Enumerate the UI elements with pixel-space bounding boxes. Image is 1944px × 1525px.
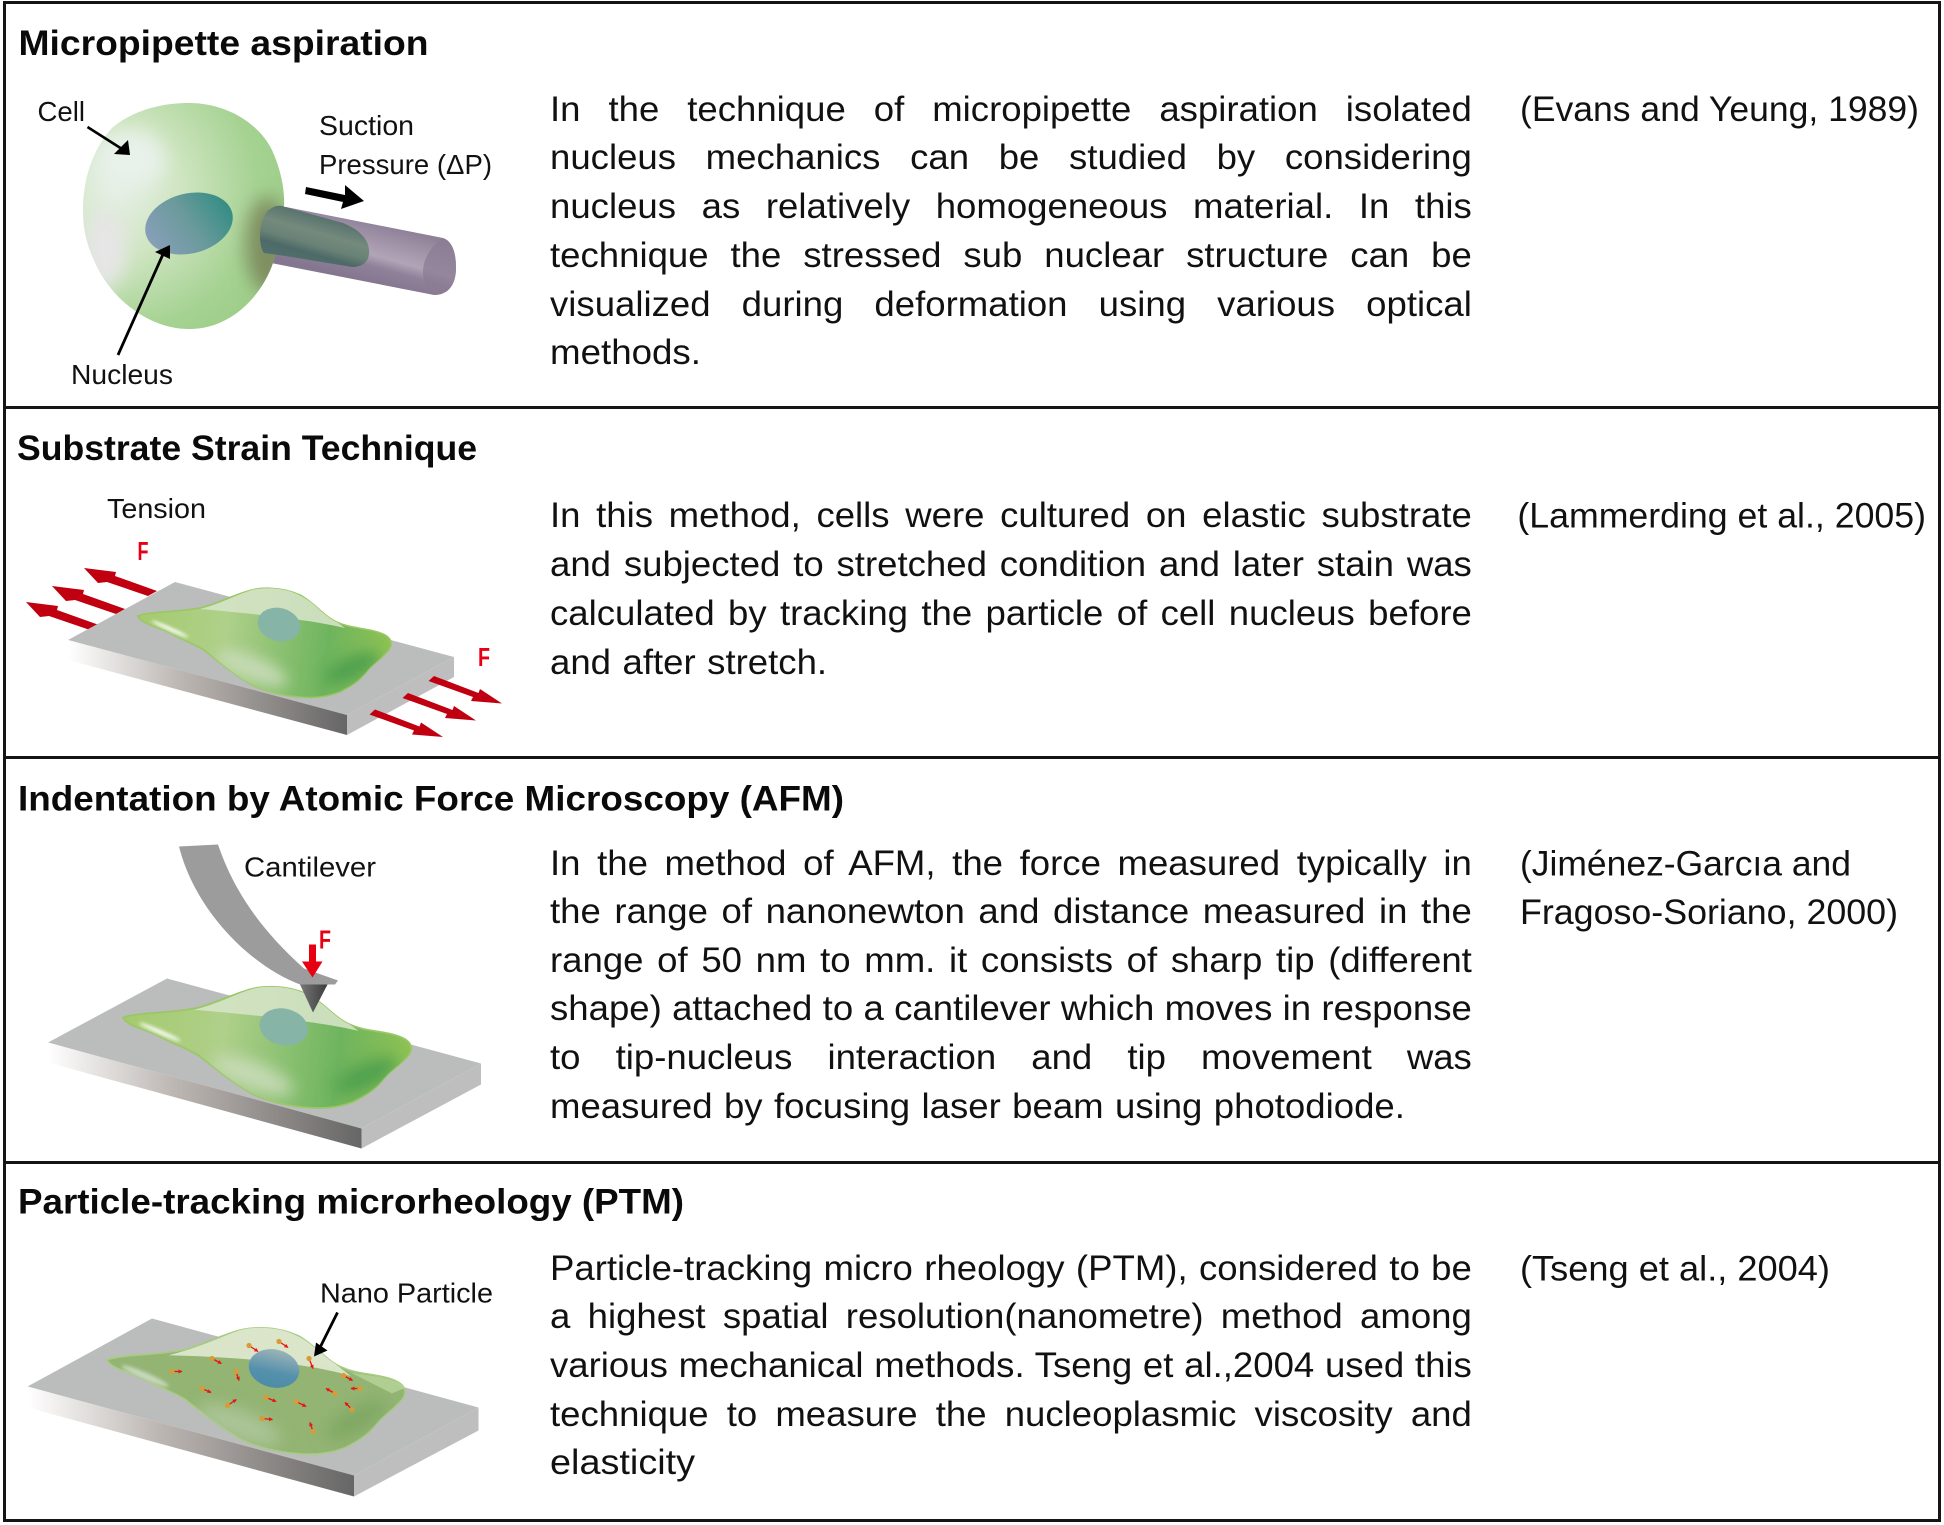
label: Suction Pressure: Suction <box>319 110 414 141</box>
arrow: suction direction <box>305 185 364 209</box>
arrow: cell <box>88 127 130 155</box>
label: Suction Pressure: Pressure (ΔP) <box>319 149 492 180</box>
heading: micropipette aspiration: Micropipette aspiration <box>18 23 428 63</box>
illustration: AFM cantilever on cell <box>48 844 481 1148</box>
text: micropipette description <box>550 89 1472 372</box>
text: substrate strain description: In this method, cells were cultured on elastic substrate <box>550 495 1472 535</box>
label: F left: F <box>138 536 148 566</box>
heading: substrate strain technique: Substrate Strain Technique <box>17 428 477 468</box>
label: Nucleus: Nucleus <box>71 359 173 390</box>
panel: micropipette aspiration <box>3 1 1940 409</box>
illustration: cell on stretched substrate <box>26 568 502 737</box>
text: PTM description: technique to measure the nucleoplasmic viscosity and <box>550 1394 1472 1434</box>
citation: Lammerding et al.: (Lammerding et al., 2005) <box>1517 496 1926 536</box>
cell body <box>83 103 290 329</box>
nano particle motion arrows <box>172 1341 360 1431</box>
label: Nano Particle: Nano Particle <box>320 1277 493 1308</box>
text: PTM description: elasticity <box>550 1442 695 1482</box>
citation: Jiménez-García and Fragoso-Soriano: (Jiménez-Garcıa and <box>1520 843 1851 883</box>
force arrow <box>302 944 322 977</box>
nucleus <box>245 1344 303 1392</box>
illustration: nano particles in cell <box>28 1318 478 1496</box>
text: micropipette description: technique the stressed sub nuclear structure can be <box>550 235 1472 275</box>
text: substrate strain description <box>550 495 1472 682</box>
citation: Jiménez-García and Fragoso-Soriano <box>1520 843 1898 931</box>
text: substrate strain description: calculated by tracking the particle of cell nucleus before <box>550 593 1472 633</box>
translucent cell <box>107 1326 406 1454</box>
nucleus <box>139 184 239 263</box>
AFM tip <box>300 984 328 1012</box>
text: micropipette description: nucleus as relatively homogeneous material. In this <box>550 186 1472 226</box>
citation: Tseng et al.: (Tseng et al., 2004) <box>1520 1248 1830 1288</box>
pipette tube <box>271 207 456 295</box>
text: micropipette description: visualized during deformation using various optical <box>550 284 1472 324</box>
heading: indentation by AFM: Indentation by Atomic Force Microscopy (AFM) <box>18 778 844 818</box>
text: AFM description: the range of nanonewton and distance measured in the <box>550 891 1472 931</box>
illustration: cell aspirated into a pipette <box>83 103 456 329</box>
panel: indentation by atomic force microscopy <box>3 756 1940 1164</box>
text: substrate strain description: and subjected to stretched condition and later stain was <box>550 544 1472 584</box>
arrow: nano particle <box>314 1312 338 1356</box>
label: Cell: Cell <box>38 96 85 127</box>
text: PTM description: a highest spatial resolution(nanometre) method among <box>550 1296 1472 1336</box>
citation: Jiménez-García and Fragoso-Soriano: Fragoso-Soriano, 2000) <box>1520 891 1898 931</box>
text: AFM description <box>550 843 1472 1126</box>
force arrows: left <box>26 568 157 630</box>
panel: particle-tracking microrheology <box>3 1160 1940 1522</box>
substrate slab <box>28 1318 478 1496</box>
text: AFM description: shape) attached to a cantilever which moves in response <box>550 988 1472 1028</box>
cell with nucleus <box>138 588 391 697</box>
text: PTM description: Particle-tracking micro rheology (PTM), considered to be <box>550 1248 1472 1288</box>
arrow: nucleus <box>118 245 170 355</box>
text: micropipette description: methods. <box>550 332 701 372</box>
text: AFM description: to tip-nucleus interaction and tip movement was <box>550 1037 1472 1077</box>
label: Cantilever: Cantilever <box>244 851 376 882</box>
text: AFM description: In the method of AFM, the force measured typically in <box>550 843 1472 883</box>
aspirated cell portion <box>260 206 369 267</box>
panel: substrate strain technique <box>3 406 1940 758</box>
text: PTM description <box>550 1248 1472 1482</box>
text: AFM description: range of 50 nm to mm. it consists of sharp tip (different <box>550 940 1472 980</box>
force arrows: right <box>370 676 502 737</box>
cell with nucleus <box>123 985 411 1108</box>
substrate slab <box>48 978 481 1148</box>
text: micropipette description: nucleus mechanics can be studied by considering <box>550 137 1472 177</box>
text: PTM description: various mechanical methods. Tseng et al.,2004 used this <box>550 1345 1472 1385</box>
label: F: F <box>319 924 331 954</box>
text: micropipette description: In the technique of micropipette aspiration isolated <box>550 89 1472 129</box>
label: Suction Pressure <box>319 110 492 180</box>
cantilever <box>179 844 338 984</box>
label: F right: F <box>478 642 490 672</box>
heading: particle-tracking microrheology: Particle-tracking microrheology (PTM) <box>18 1181 684 1221</box>
text: AFM description: measured by focusing laser beam using photodiode. <box>550 1086 1405 1126</box>
citation: Evans and Yeung: (Evans and Yeung, 1989) <box>1520 89 1919 129</box>
text: substrate strain description: and after stretch. <box>550 642 827 682</box>
substrate slab <box>68 582 454 735</box>
nano particles <box>169 1338 363 1434</box>
label: Tension: Tension <box>107 493 206 524</box>
